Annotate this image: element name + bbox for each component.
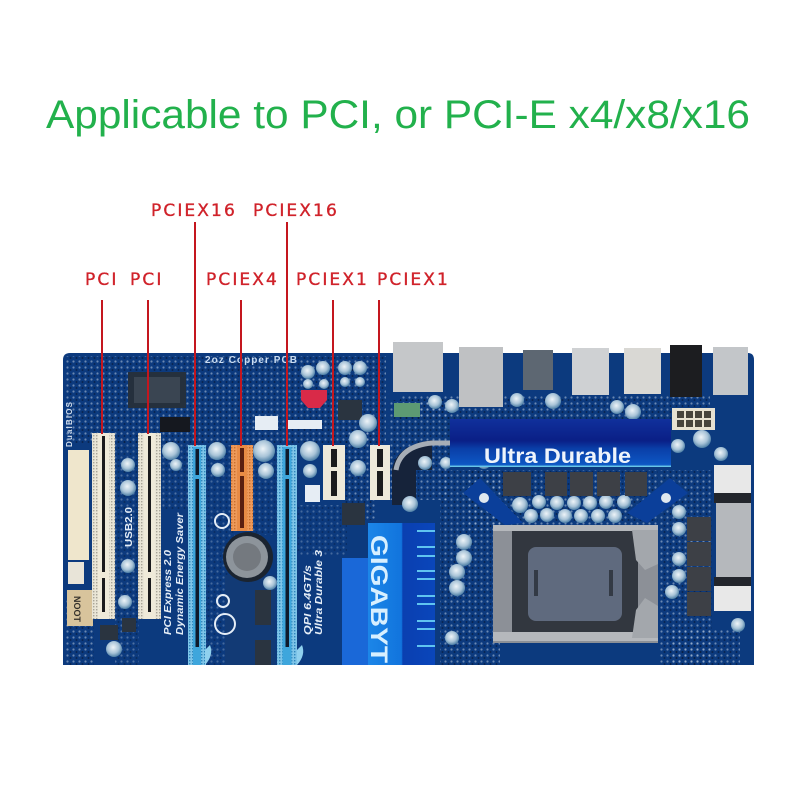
Ultra Durable heatsink [450,419,671,468]
PCIe x1 slot 2 [370,445,390,500]
NOOT text: NOOT [72,596,82,623]
board print text: 2oz Copper PCB [205,355,297,366]
PCI slot 2 [138,433,161,619]
label: PCIEX1 left: PCIEX1 [296,270,369,290]
header [160,417,190,432]
board silkscreen text [124,507,325,635]
PCIe x4 slot [231,445,253,531]
port: right [713,347,748,395]
capacitors [106,361,745,657]
line: PCIEX1 left [332,300,334,446]
label: PCIEX4: PCIEX4 [206,270,279,290]
port: audio black [670,345,702,397]
line: PCIEX16 right [286,222,288,446]
rear heatsink [714,465,751,611]
MOSFET row [503,472,647,496]
port: USB pair [572,348,609,395]
line: PCI left [101,300,103,434]
red connector [301,390,327,408]
CMOS battery [223,532,273,582]
8-pin power connector [672,408,715,430]
board silkscreen text: Ultra Durable 3 [314,549,325,635]
GIGABYTE heatsink [342,523,435,665]
PCI slot 1 [92,433,115,619]
Ultra Durable heatsink: Ultra Durable [484,445,631,468]
chip [128,372,186,408]
label: PCI left: PCI [85,270,118,290]
PCB texture [66,356,740,665]
IDE connector [68,450,89,584]
motherboard photo [63,342,754,665]
DualBIOS text: DualBIOS [65,401,74,447]
title: Applicable to PCI, or PCI-E x4/x8/x16 [46,93,750,137]
PCIe x16 slot 2 [277,445,303,665]
board silkscreen text: USB2.0 [124,507,135,547]
line: PCIEX16 left [194,222,196,446]
port: LAN [459,347,503,407]
small connector [67,590,93,626]
port: USB [523,350,553,390]
label: PCI right: PCI [130,270,163,290]
board silkscreen text: PCI Express 2.0 [163,550,174,635]
port: audio stack [393,342,443,392]
I/O ports [393,342,748,417]
panel: board [63,353,754,665]
heat pipe [396,443,452,470]
board silkscreen text: QPI 6.4GT/s [303,564,314,635]
PCIe x16 slot 1 [188,445,211,665]
line: PCI right [147,300,149,434]
CPU socket [493,525,658,643]
GIGABYTE heatsink: GIGABYT [365,535,392,663]
heat pipe shadow [392,440,432,505]
port: eSATA [624,348,661,394]
MOSFET column [687,517,711,616]
leader lines [102,222,379,446]
green connector [394,403,420,417]
small chips [100,400,365,665]
logo circles [215,514,235,634]
label: PCIEX16 right: PCIEX16 [253,201,339,221]
PCIe x1 slot 1 [323,445,345,500]
board silkscreen text: Dynamic Energy Saver [175,512,186,635]
white labels [255,416,322,502]
line: PCIEX1 right [378,300,380,446]
CPU power arms [463,478,688,525]
label: PCIEX1 right: PCIEX1 [377,270,450,290]
label: PCIEX16 left: PCIEX16 [151,201,237,221]
line: PCIEX4 [240,300,242,446]
